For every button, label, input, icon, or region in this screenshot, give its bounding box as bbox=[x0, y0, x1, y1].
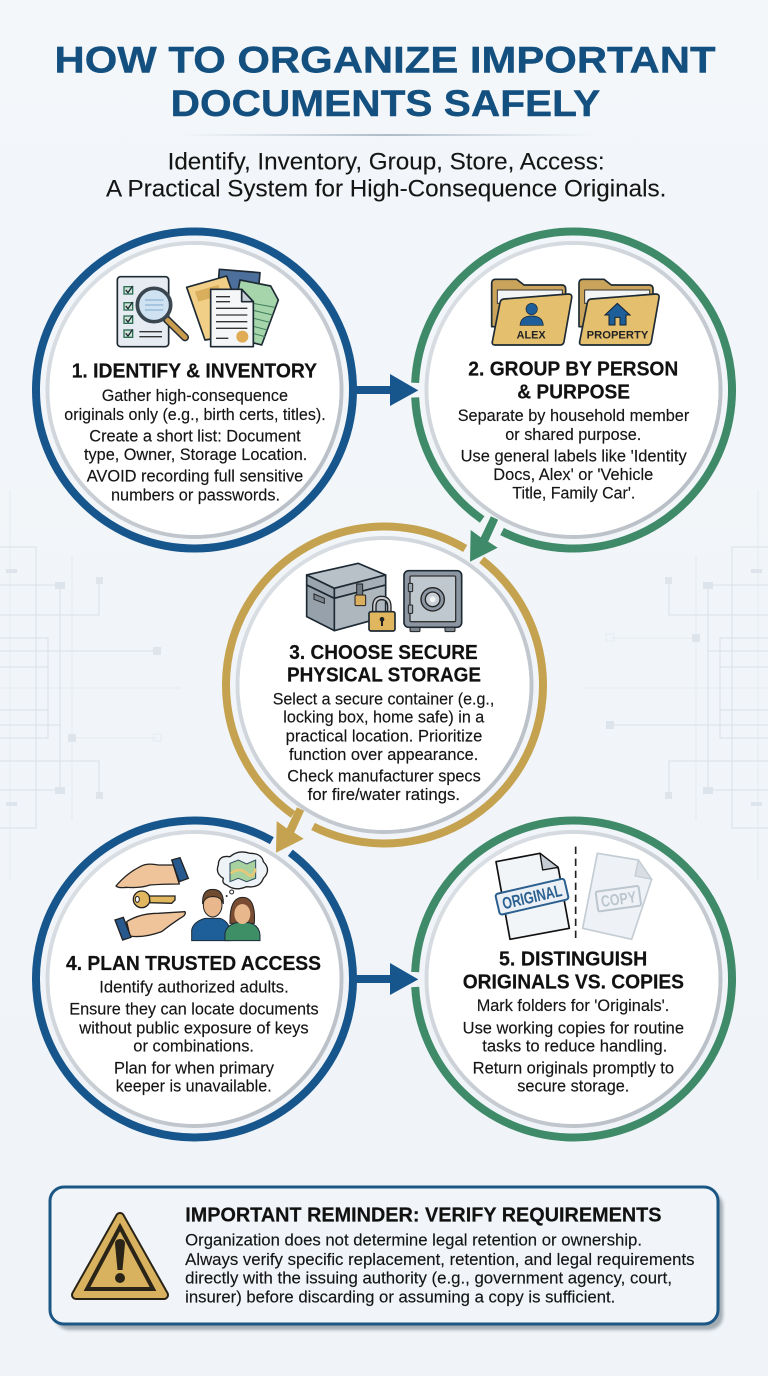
icon: labelled folders: PROPERTY bbox=[587, 330, 648, 342]
panel: step 4 plan trusted access bbox=[0, 757, 417, 1201]
panel: step 3 choose secure physical storage bbox=[162, 463, 607, 907]
heading: 1. IDENTIFY & INVENTORY bbox=[72, 360, 317, 383]
heading: & PURPOSE bbox=[517, 380, 630, 403]
body text bbox=[273, 690, 494, 804]
body text: originals only (e.g., birth certs, titles). bbox=[64, 406, 326, 424]
heading bbox=[468, 357, 678, 403]
body text: without public exposure of keys bbox=[78, 1019, 309, 1037]
body text: Return originals promptly to bbox=[473, 1059, 674, 1077]
body text bbox=[463, 997, 684, 1096]
heading: 4. PLAN TRUSTED ACCESS bbox=[66, 952, 321, 975]
body text: Create a short list: Document bbox=[89, 428, 301, 446]
heading bbox=[463, 947, 684, 993]
body text: Select a secure container (e.g., bbox=[273, 690, 494, 708]
heading: ORIGINALS VS. COPIES bbox=[463, 970, 684, 993]
panel: step 5 distinguish originals vs copies bbox=[408, 814, 739, 1144]
body text: Docs, Alex' or 'Vehicle bbox=[493, 466, 653, 484]
icon: original and copy documents bbox=[495, 847, 652, 940]
body text: locking box, home safe) in a bbox=[283, 709, 485, 727]
subtitle: Identify, Inventory, Group, Store, Access: bbox=[168, 148, 605, 175]
body text: tasks to reduce handling. bbox=[482, 1038, 667, 1056]
subtitle: A Practical System for High-Consequence Originals. bbox=[106, 176, 666, 203]
icon: original and copy documents: ORIGINAL bbox=[500, 881, 564, 913]
body text bbox=[458, 407, 690, 502]
body text: secure storage. bbox=[517, 1078, 629, 1096]
body text: or shared purpose. bbox=[505, 426, 641, 444]
heading: 5. DISTINGUISH bbox=[499, 947, 647, 970]
reminder text bbox=[185, 1232, 694, 1306]
heading bbox=[287, 641, 481, 687]
body text: Separate by household member bbox=[458, 407, 690, 425]
body text: Plan for when primary bbox=[114, 1059, 275, 1077]
body text: Use general labels like 'Identity bbox=[461, 448, 688, 466]
reminder text: directly with the issuing authority (e.g., government agency, court, bbox=[185, 1269, 672, 1287]
body text: keeper is unavailable. bbox=[116, 1078, 272, 1096]
title bbox=[54, 39, 716, 124]
body text: Gather high-consequence bbox=[102, 387, 288, 405]
body text: AVOID recording full sensitive bbox=[87, 468, 303, 486]
arrow: step 1 to step 2 bbox=[356, 374, 418, 406]
body text: type, Owner, Storage Location. bbox=[84, 446, 307, 464]
body text bbox=[64, 387, 326, 505]
reminder text: insurer) before discarding or assuming a copy is sufficient. bbox=[185, 1288, 615, 1306]
body text: numbers or passwords. bbox=[111, 487, 280, 505]
arrow: step 3 to step 4 bbox=[276, 807, 304, 853]
body text bbox=[69, 979, 319, 1096]
heading: 3. CHOOSE SECURE bbox=[289, 641, 478, 664]
body text: Mark folders for 'Originals'. bbox=[477, 997, 669, 1015]
body text: for fire/water ratings. bbox=[308, 786, 460, 804]
title: HOW TO ORGANIZE IMPORTANT bbox=[54, 39, 716, 81]
body text: Identify authorized adults. bbox=[99, 979, 289, 997]
body text: Check manufacturer specs bbox=[287, 768, 481, 786]
title: DOCUMENTS SAFELY bbox=[171, 82, 600, 124]
arrow: step 4 to step 5 bbox=[356, 963, 418, 995]
reminder heading: IMPORTANT REMINDER: VERIFY REQUIREMENTS bbox=[185, 1204, 661, 1227]
reminder text: Always verify specific replacement, retention, and legal requirements bbox=[185, 1251, 694, 1269]
reminder text: Organization does not determine legal retention or ownership. bbox=[185, 1232, 642, 1250]
icon: original and copy documents: COPY bbox=[600, 889, 638, 911]
icon: labelled folders: ALEX bbox=[517, 330, 546, 342]
icon: warning triangle bbox=[76, 1217, 164, 1295]
body text: Title, Family Car'. bbox=[512, 484, 635, 502]
arrow: step 2 to step 3 bbox=[470, 516, 498, 562]
subtitle bbox=[106, 148, 666, 203]
icon: labelled folders bbox=[492, 279, 659, 345]
body text: Ensure they can locate documents bbox=[69, 1000, 319, 1018]
icon: checklist, magnifier and document stack bbox=[117, 269, 278, 347]
body text: Use working copies for routine bbox=[463, 1019, 684, 1037]
body text: practical location. Prioritize bbox=[286, 728, 482, 746]
heading: 2. GROUP BY PERSON bbox=[468, 357, 678, 380]
heading: PHYSICAL STORAGE bbox=[287, 664, 481, 687]
icon: lock box and home safe bbox=[307, 563, 462, 632]
callout: important reminder bbox=[50, 1187, 723, 1330]
body text: or combinations. bbox=[133, 1038, 254, 1056]
panel: step 2 group by person and purpose bbox=[408, 224, 739, 556]
panel: step 1 identify and inventory bbox=[36, 232, 353, 548]
body text: function over appearance. bbox=[289, 746, 478, 764]
icon: hands passing key and trusted adults bbox=[115, 852, 267, 941]
